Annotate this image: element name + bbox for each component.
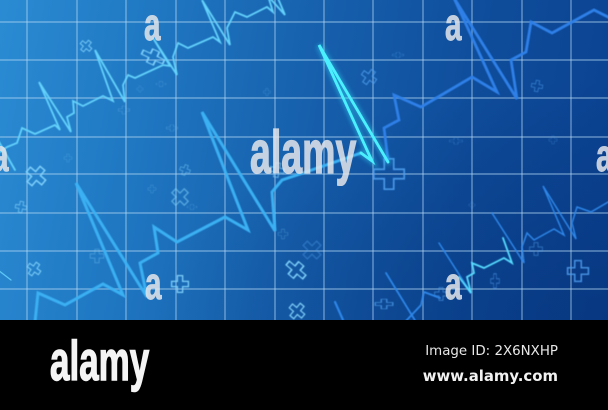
watermark: a lower left: a: [145, 258, 162, 309]
footer logo: alamy: [50, 329, 149, 392]
ECG trace: bright cyan peak: [319, 45, 388, 162]
watermark: a lower right: a: [445, 258, 462, 309]
watermark: a top left: a: [144, 0, 161, 50]
footer: black bar: [0, 320, 608, 410]
ECG trace: centre: [35, 112, 361, 322]
website: www.alamy.com: [423, 367, 558, 385]
panel: blue heart-monitor background: [0, 0, 608, 320]
ECG trace: lower right bright: [459, 238, 512, 293]
icons: plus signs: [15, 38, 588, 322]
ECG trace: left edge fragment: [0, 270, 11, 280]
ECG trace: bright cyan peak glow: [319, 45, 388, 162]
image ID: Image ID: 2X6NXHP: [425, 344, 558, 359]
watermark: centre alamy: alamy: [250, 119, 356, 186]
ECG trace: upper right: [384, 0, 608, 160]
chart: grid, crosses and ECG traces: [0, 0, 608, 320]
watermark: a top right: a: [445, 0, 462, 50]
ECG trace: top left: [0, 0, 285, 170]
ECG trace: lower right faint: [335, 186, 608, 322]
